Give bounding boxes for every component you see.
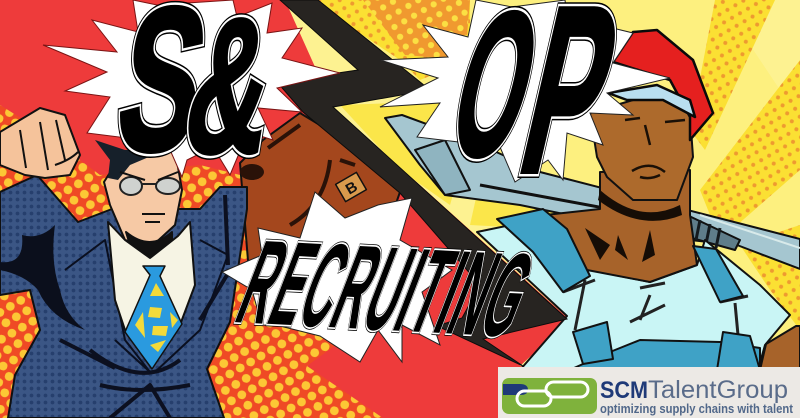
burst: S and ampersand white starburst [43,0,340,177]
briefcase B tag [336,172,366,202]
title word: RECRUITING: RECRUITING [222,216,550,361]
panel: red left background [0,0,525,418]
logo: SCM Talent Group banner: TalentGroup [648,376,788,404]
hero head [104,150,182,248]
worker overalls [497,209,760,372]
worker shirt [477,218,790,370]
hero lapels [65,240,228,372]
burst: OP white starburst [380,0,670,182]
panel: yellow right background [285,0,800,418]
worker neck shading [585,190,682,262]
title word: RECRUITING: RECRUITING [222,216,550,361]
hero shirt collar [108,222,195,330]
hero suit [0,175,247,418]
worker forearm [760,326,800,370]
hero hair [95,140,170,180]
hero tie with B [125,266,182,369]
figure: businessman superhero [0,108,247,418]
briefcase B tag: B [343,178,361,198]
hero glasses [120,177,180,195]
title word: OP [433,0,638,223]
title word: RECRUITING: RECRUITING [222,216,550,361]
worker shirt folds [563,280,748,335]
hero suit shadows [0,225,85,330]
icon: brown briefcase [240,113,400,290]
logo wordmark: SCM [600,377,648,404]
icon: large pipe wrench [385,115,800,269]
title word: S& [105,0,288,194]
figure: worker in hard hat [477,30,800,372]
hero fist [0,108,80,178]
hard hat [608,30,713,140]
worker neck [545,170,697,282]
logo mark: green chain links [502,378,597,414]
worker face [590,98,693,200]
logo: SCM Talent Group banner [498,367,800,418]
lightning zigzag divider [277,0,567,366]
burst: RECRUITING white starburst [222,192,452,362]
hero brows and mouth [120,172,178,256]
worker facial features [625,118,685,178]
